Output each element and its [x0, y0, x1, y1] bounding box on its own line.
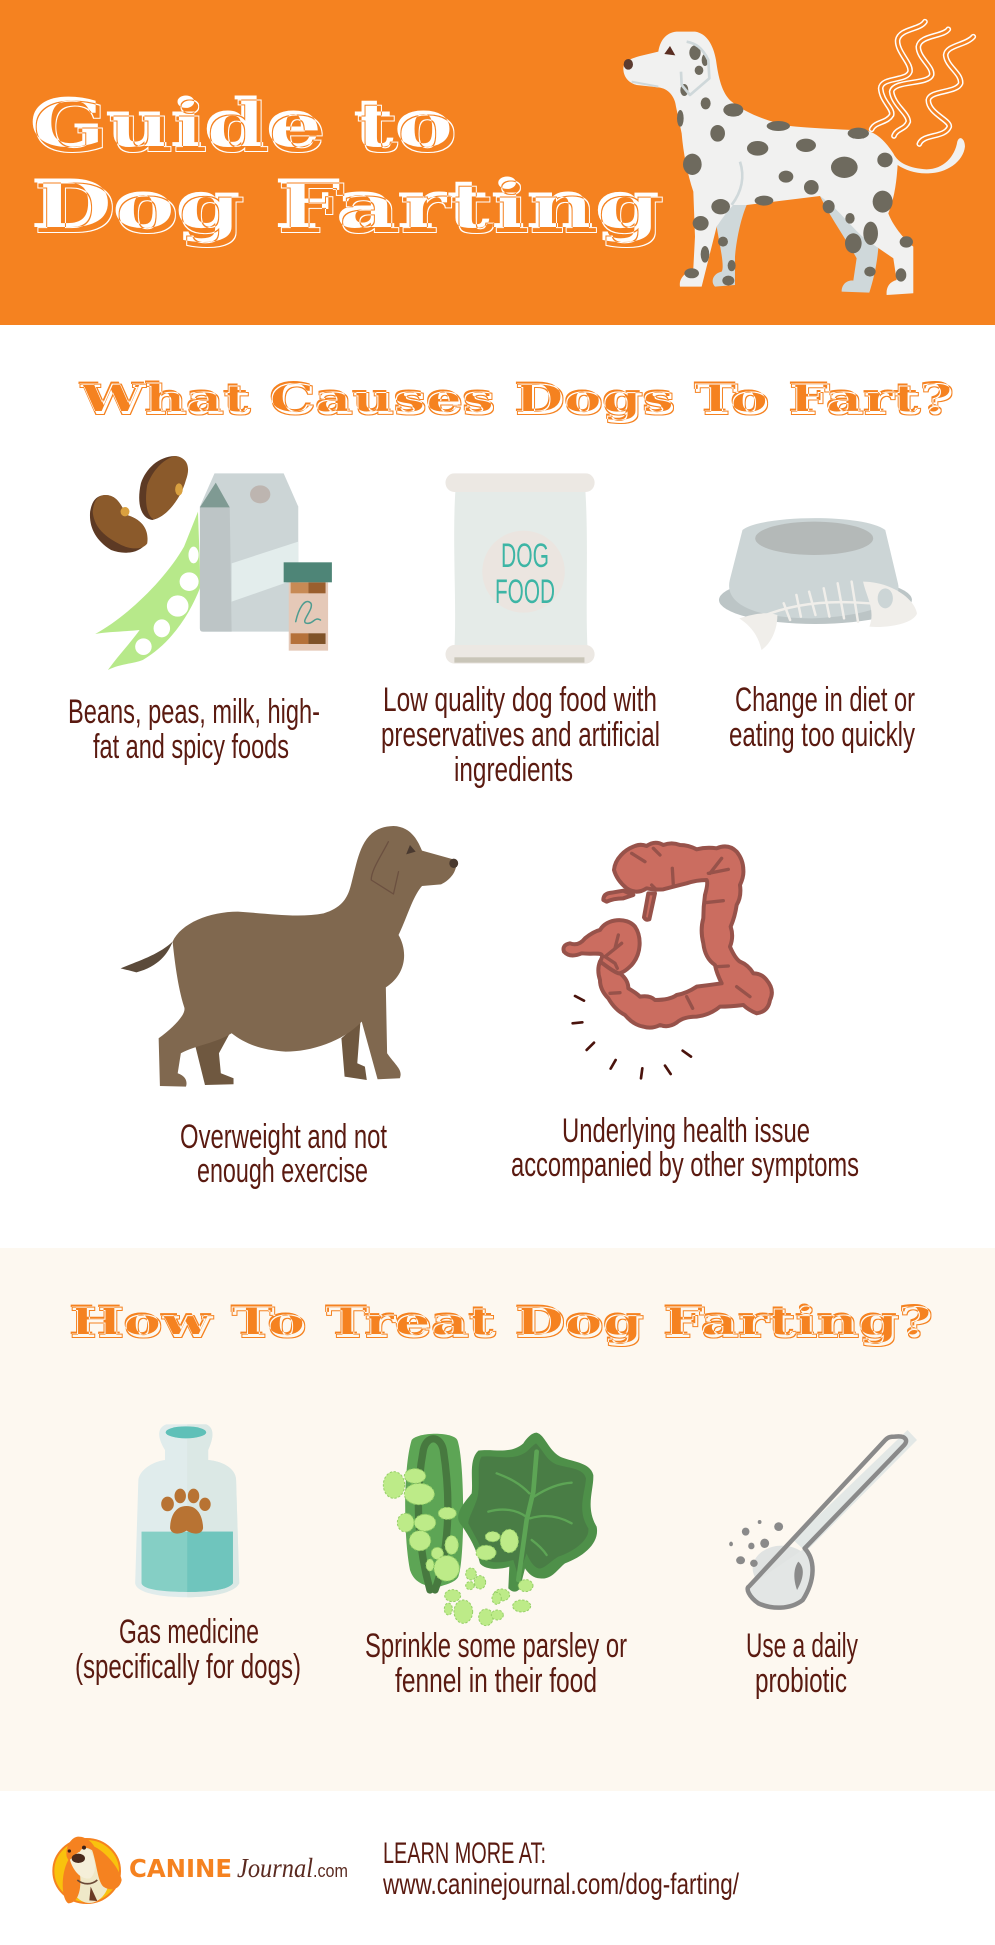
- icon: medicine bottle: [135, 1424, 239, 1597]
- label: health issue text: accompanied by other symptoms: [511, 1146, 859, 1184]
- label: diet text: [729, 681, 915, 754]
- label: health issue text: Underlying health issue: [562, 1112, 810, 1150]
- label: health issue text: [511, 1112, 859, 1184]
- label: dog food text: preservatives and artificial: [381, 716, 660, 754]
- label: beans text: Beans, peas, milk, high-: [68, 693, 320, 731]
- bag label text: FOOD: [495, 573, 555, 611]
- label: diet text: Change in diet or: [735, 681, 915, 719]
- label: overweight text: [180, 1118, 387, 1190]
- label: gas medicine text: (specifically for dogs): [75, 1648, 301, 1686]
- panel: footer logo: [53, 1837, 739, 1903]
- icon: pain tick marks: [573, 996, 691, 1078]
- label: probiotic text: probiotic: [755, 1662, 847, 1700]
- panel: header banner: [0, 0, 995, 325]
- label: probiotic text: Use a daily: [746, 1627, 858, 1665]
- learn more text: [382, 1837, 739, 1901]
- panel: overweight: [121, 826, 458, 1190]
- icon: intestines: [563, 843, 772, 1028]
- logo wordmark: [129, 1853, 348, 1883]
- heading: how to treat dog farting: How To Treat Dog Farting?: [68, 1297, 931, 1344]
- label: gas medicine text: Gas medicine: [119, 1613, 259, 1651]
- icon: spoon with powder: [729, 1430, 917, 1608]
- title: [29, 84, 660, 243]
- label: overweight text: Overweight and not: [180, 1118, 387, 1156]
- logo wordmark: CANINE: [129, 1854, 232, 1883]
- label: dog food text: [381, 681, 660, 789]
- icon: fennel, leaf and parsley: [383, 1433, 597, 1626]
- panel: low quality dog food: [381, 473, 660, 789]
- icon: bowl and fish bones: [719, 518, 917, 650]
- treatment: gas medicine: [75, 1424, 301, 1686]
- title: Dog Farting: [30, 165, 660, 243]
- label: beans text: [68, 693, 320, 766]
- panel: beans, peas, milk, spicy foods: [68, 456, 332, 766]
- label: diet text: eating too quickly: [729, 716, 915, 754]
- treatment: probiotic: [729, 1430, 917, 1700]
- label: beans text: fat and spicy foods: [93, 728, 289, 766]
- label: parsley text: Sprinkle some parsley or: [365, 1627, 627, 1665]
- logo wordmark: .com: [313, 1861, 348, 1881]
- icon: dog food bag: [445, 473, 595, 664]
- icon: overweight brown dog: [121, 826, 458, 1087]
- logo wordmark: Journal: [237, 1853, 313, 1883]
- label: gas medicine text: [75, 1613, 301, 1686]
- learn more text: LEARN MORE AT:: [383, 1837, 546, 1870]
- label: overweight text: enough exercise: [197, 1152, 368, 1190]
- label: probiotic text: [746, 1627, 858, 1700]
- panel: how to treat section: [0, 1248, 995, 1791]
- treatment: parsley or fennel: [365, 1433, 627, 1700]
- label: dog food text: ingredients: [454, 751, 573, 789]
- panel: health issue: [511, 843, 859, 1184]
- bag label text: DOG: [501, 537, 549, 575]
- label: dog food text: Low quality dog food with: [383, 681, 657, 719]
- learn more text: www.caninejournal.com/dog-farting/: [382, 1868, 739, 1901]
- label: parsley text: [365, 1627, 627, 1700]
- bag label text: [495, 537, 555, 611]
- title: Guide to: [29, 84, 453, 162]
- icon: fart stink waves: [872, 22, 973, 144]
- heading: what causes dogs to fart: What Causes Dogs To Fart?: [78, 374, 952, 421]
- icon: dalmatian dog: [623, 32, 965, 295]
- label: parsley text: fennel in their food: [395, 1662, 597, 1700]
- icon: basset hound logo: [53, 1837, 122, 1903]
- icon: beans, pea pod, milk carton and spice jar: [90, 456, 332, 670]
- panel: change in diet: [719, 518, 917, 754]
